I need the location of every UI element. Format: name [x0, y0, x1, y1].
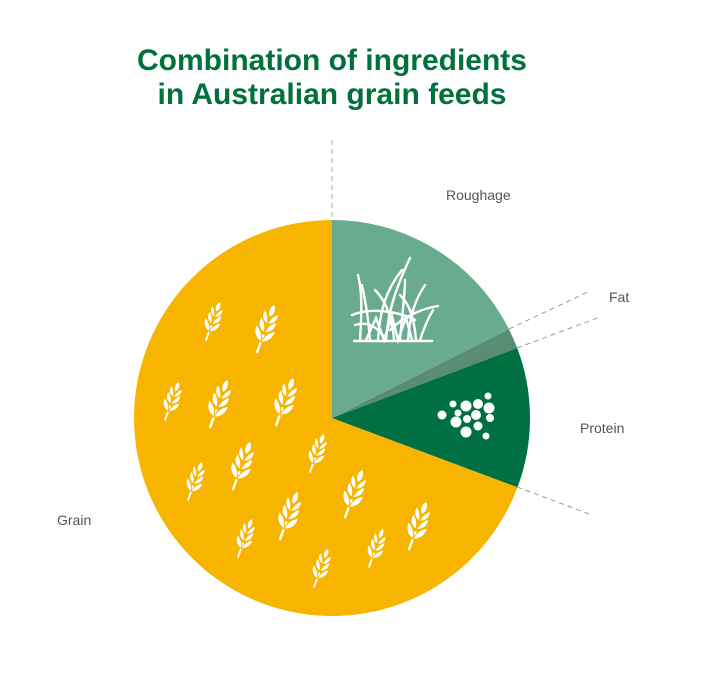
label: protein: Protein — [580, 420, 624, 436]
leader lines — [509, 291, 600, 515]
leader line: top — [331, 140, 333, 220]
slice: roughage — [332, 220, 509, 418]
label: roughage: Roughage — [446, 187, 511, 203]
slice: fat — [332, 329, 517, 418]
pie chart — [134, 220, 530, 616]
title — [137, 44, 527, 111]
icon: protein pellets — [438, 392, 494, 440]
title: Combination of ingredients — [137, 44, 527, 77]
title: in Australian grain feeds — [158, 78, 506, 111]
label: grain: Grain — [57, 512, 91, 528]
slice: protein — [332, 348, 530, 487]
slice: grain — [134, 220, 518, 616]
icon: grass — [352, 258, 438, 341]
label: fat: Fat — [609, 289, 629, 305]
icons: wheat — [157, 299, 436, 590]
